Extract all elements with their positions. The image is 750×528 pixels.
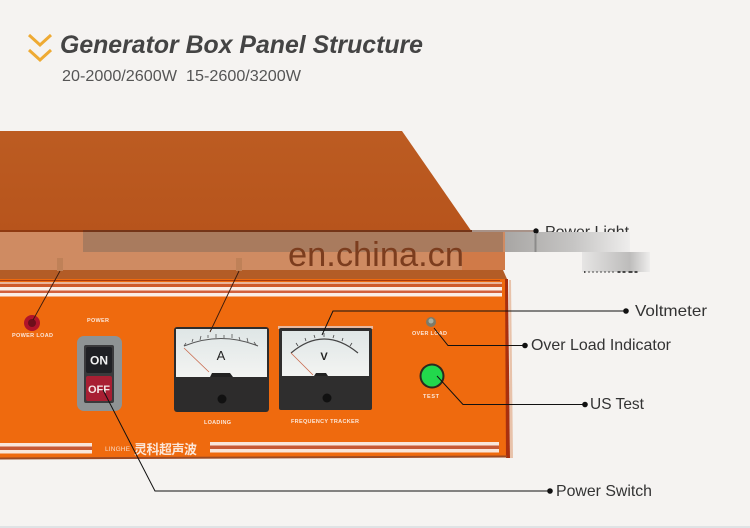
voltmeter [278, 326, 373, 425]
test label: TEST [423, 394, 440, 400]
callout: voltmeter [322, 303, 708, 335]
callout: power switch [103, 390, 652, 500]
power load lamp [12, 315, 53, 339]
power switch: OFF [88, 384, 110, 396]
front panel [0, 279, 509, 459]
callout: voltmeter: Voltmeter [635, 303, 708, 320]
callout: ammeter leader [210, 271, 239, 332]
power switch [77, 318, 122, 411]
box front lip [0, 270, 507, 279]
power load label: POWER LOAD [12, 333, 53, 339]
voltmeter label: FREQUENCY TRACKER [291, 419, 359, 425]
power switch: POWER [87, 318, 109, 324]
watermark text: en.china.cn [288, 236, 464, 274]
brand text [105, 442, 197, 457]
subtitle: power ratings: 20-2000/2600W 15-2600/3200W [62, 68, 302, 85]
callout: over load indicator [434, 328, 672, 354]
callout: hidden ammeter label remnant [584, 271, 638, 273]
callout: power light [83, 224, 630, 252]
callout: us test: US Test [590, 396, 645, 413]
callout: power load leader [33, 271, 60, 320]
panel bottom stripes [0, 442, 499, 454]
on button [86, 347, 112, 373]
voltmeter letter: V [320, 351, 328, 363]
watermark band [0, 232, 650, 274]
callout: over load indicator: Over Load Indicator [531, 337, 672, 354]
callout: power light: Power Light [545, 224, 630, 241]
title: Generator Box Panel Structure [60, 31, 423, 59]
overload indicator [412, 317, 447, 337]
generator box [0, 131, 513, 460]
panel top stripes [0, 280, 502, 296]
ammeter [174, 327, 269, 426]
box lid [0, 131, 472, 232]
brand text: 灵科超声波 [134, 442, 197, 457]
icon: double chevron [29, 35, 51, 60]
test button [420, 364, 444, 400]
off button [86, 376, 112, 401]
ammeter letter: A [217, 348, 226, 363]
power switch: ON [90, 354, 108, 368]
brand text: LINGHE [105, 446, 131, 453]
callout: power switch: Power Switch [556, 483, 652, 500]
callout: us test [437, 376, 645, 413]
overload label: OVER LOAD [412, 331, 447, 337]
ammeter label: LOADING [204, 420, 231, 426]
